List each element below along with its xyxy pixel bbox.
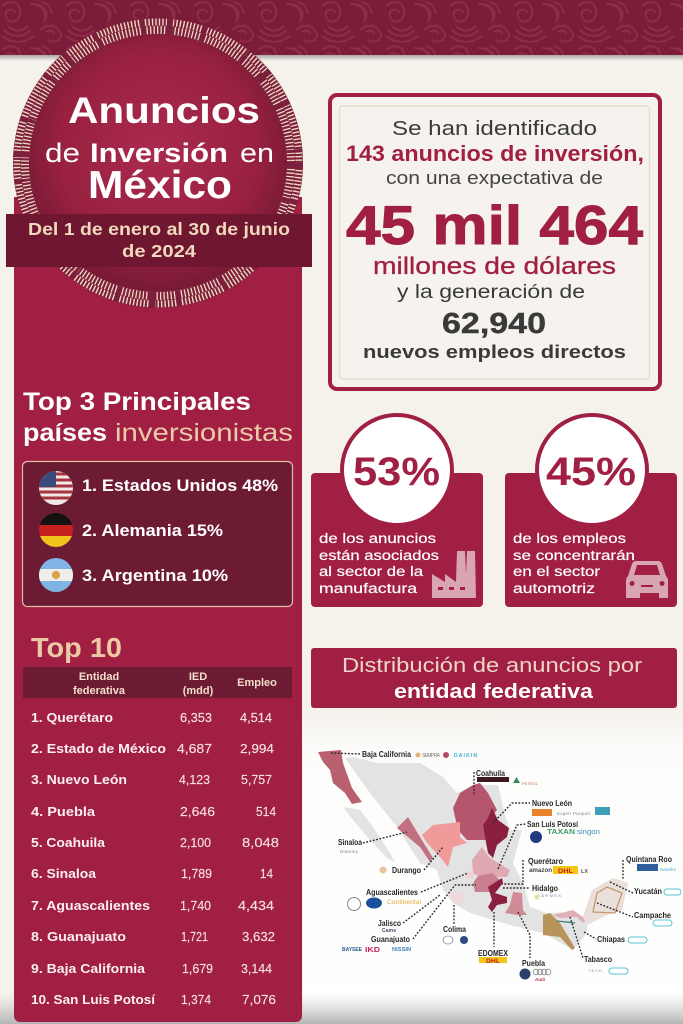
table rows: 14 (260, 866, 273, 881)
label: Querétaro: amazon (529, 867, 552, 874)
label: Quintana Roo (626, 855, 676, 872)
label: Guanajuato: BAYSEE (342, 947, 363, 953)
title text: Anuncios (68, 90, 260, 131)
table rows: 514 (256, 804, 276, 819)
table rows: 8,048 (242, 835, 279, 850)
label: Nuevo León: Expert Parquet (557, 811, 591, 816)
decorative top band (0, 0, 683, 61)
heading: top 3 countries: Top 3 Principales (23, 388, 251, 416)
icon: Argentina flag (39, 558, 73, 592)
title text: México (88, 164, 232, 207)
Nuevo León (483, 808, 509, 858)
label: Quintana Roo: Quintana Roo (626, 855, 672, 864)
heading: map title: entidad federativa (394, 681, 594, 703)
table rows: 2,100 (180, 835, 211, 850)
label: Chiapas: Chiapas (597, 935, 625, 944)
table header: Empleo (237, 677, 277, 689)
date ribbon: Del 1 de enero al 30 de junio (28, 219, 290, 239)
panel: 45% automotive card: 45% (546, 450, 636, 494)
title text (45, 90, 274, 207)
table rows: 3. Nuevo León (31, 772, 127, 787)
table rows: 4,687 (177, 741, 212, 756)
table rows: 3,632 (242, 929, 275, 944)
label: Querétaro: Querétaro (528, 857, 563, 866)
label: Aguascalientes: Continental (387, 900, 421, 906)
table rows: 4,123 (179, 772, 210, 787)
label: Yucatán: Yucatán (634, 887, 662, 896)
panel: 53% manufacturing card: manufactura (319, 581, 418, 596)
table rows: 4. Puebla (31, 804, 96, 819)
label: Campeche: Campache (634, 911, 671, 920)
table rows: 1,740 (180, 898, 211, 913)
table rows: 9. Baja California (31, 961, 146, 976)
label: Sinaloa (338, 838, 362, 854)
number: jobs: 62,940 (442, 308, 546, 340)
label: Colima (443, 925, 468, 944)
label: Baja California: SEMPRA (422, 753, 441, 759)
map area background (303, 712, 683, 1024)
date ribbon (6, 214, 312, 267)
date ribbon: de 2024 (122, 241, 196, 261)
label: Colima: Colima (443, 925, 466, 934)
table rows: 1. Querétaro (31, 710, 113, 725)
label: Baja California: DAIKIN (454, 753, 477, 759)
label: Aguascalientes: Aguascalientes (366, 888, 418, 897)
panel: headline figures: Se han identificado (392, 118, 597, 140)
label: Tabasco: Tabasco (584, 955, 612, 964)
label: Querétaro: LX (581, 869, 588, 875)
label: San Luis Potosí: TAXAN (547, 829, 575, 836)
label: Baja California (362, 750, 477, 759)
text: Argentina: 3. Argentina 10% (82, 566, 228, 585)
label: Querétaro: DHL (558, 868, 573, 875)
panel: 45% automotive card (505, 415, 677, 607)
Coahuila (453, 783, 497, 840)
table rows: 2. Estado de México (31, 741, 166, 756)
Yucatán peninsula (583, 878, 628, 925)
table rows: 8. Guanajuato (31, 929, 126, 944)
label: Nuevo León: Nuevo León (532, 799, 572, 808)
label: Jalisco: Cams (382, 928, 396, 934)
text: Alemania: 2. Alemania 15% (82, 521, 223, 540)
panel: headline figures: millones de dólares (373, 253, 616, 280)
panel: 53% manufacturing card: 53% (353, 450, 440, 494)
label: Baja California: Baja California (362, 750, 411, 759)
label: Tabasco: TECH (588, 968, 602, 973)
heading: top 3 countries (23, 388, 293, 447)
table header: federativa (73, 685, 126, 697)
label: Sinaloa: Sinaloa (338, 838, 362, 847)
label: Yucatán (634, 887, 681, 896)
label: Coahuila: Coahuila (476, 769, 505, 778)
label: Guanajuato: Guanajuato (371, 935, 410, 944)
Chiapas area (543, 913, 575, 950)
label: San Luis Potosí: San Luis Potosí (527, 820, 579, 829)
label: Nuevo León (532, 799, 610, 816)
map leader lines (331, 753, 633, 958)
label: Durango (380, 866, 421, 875)
table rows: 1,789 (181, 866, 212, 881)
table header (23, 667, 292, 698)
panel: 53% manufacturing card: están asociados (319, 548, 439, 563)
title text: en (240, 138, 274, 168)
heading: top 10: Top 10 (31, 632, 122, 663)
panel: headline figures: y la generación de (397, 282, 585, 303)
Sinaloa (397, 817, 433, 862)
panel: 53% manufacturing card: al sector de la (319, 564, 424, 579)
icon: Germany flag (39, 513, 73, 547)
title text: Inversión (90, 138, 228, 168)
label: Coahuila (476, 769, 539, 786)
map labels and logos (338, 750, 681, 982)
label: EDOMEX: EDOMEX (478, 949, 509, 958)
label: Puebla: Audi (535, 977, 545, 982)
table rows: 2,646 (180, 804, 215, 819)
panel: headline figures (330, 95, 660, 389)
Guanajuato (473, 873, 500, 892)
table rows: 1,679 (182, 961, 213, 976)
heading: map title (311, 648, 677, 708)
Puebla (505, 892, 527, 915)
label: Aguascalientes (348, 888, 421, 910)
panel: headline figures: 143 anuncios de inversión, (346, 141, 644, 166)
heading: map title: Distribución de anuncios por (342, 655, 642, 677)
icon: USA flag (39, 471, 73, 505)
label: Jalisco: Jalisco (378, 919, 401, 928)
table header: (mdd) (183, 685, 214, 697)
label: Guanajuato (342, 935, 411, 954)
label: San Luis Potosí (527, 820, 600, 843)
label: Querétaro (528, 857, 588, 875)
panel: 45% automotive card: automotriz (513, 581, 595, 596)
text: Estados Unidos: 1. Estados Unidos 48% (82, 476, 278, 495)
table rows: 4,514 (240, 710, 272, 725)
panel: 53% manufacturing card (311, 415, 483, 607)
table: top 10 states (23, 667, 292, 1007)
table rows: 10. San Luis Potosí (31, 992, 155, 1007)
label: Puebla (520, 959, 551, 982)
label: EDOMEX (478, 949, 509, 965)
table rows: 3,144 (241, 961, 272, 976)
table rows: 2,994 (240, 741, 274, 756)
label: Guanajuato: NISSIN (392, 947, 411, 953)
label: EDOMEX: DHL (486, 959, 500, 965)
table rows: 6. Sinaloa (31, 866, 97, 881)
label: Sinaloa: Diamley (340, 849, 359, 854)
table rows: 1,721 (181, 929, 208, 944)
table header: Entidad (79, 671, 119, 683)
panel: 53% manufacturing card: de los anuncios (319, 531, 436, 546)
Estado de México (488, 878, 507, 912)
label: San Luis Potosí: singon (577, 829, 600, 836)
panel: 45% automotive card: en el sector (513, 564, 601, 579)
label: Campeche (634, 911, 672, 926)
Jalisco (450, 892, 465, 905)
icon: factory (432, 551, 476, 598)
label: Hidalgo: Hidalgo (532, 884, 558, 893)
Baja California (318, 750, 362, 804)
ornamental ring (13, 18, 303, 308)
panel: headline figures: con una expectativa de (386, 168, 603, 188)
bottom fade (0, 993, 683, 1024)
label: Jalisco (378, 919, 401, 934)
number: investment amount: 45 mil 464 (346, 194, 643, 256)
San Luis Potosí (472, 847, 510, 877)
title text: de (45, 138, 80, 168)
panel: 45% automotive card: de los empleos (513, 531, 626, 546)
label: Puebla: Puebla (522, 959, 545, 968)
label: Hidalgo (532, 884, 561, 900)
inner disc (30, 35, 286, 291)
panel: top 3 countries list (22, 462, 292, 606)
map: Mexico by state (318, 750, 628, 950)
heading: top 3 countries: países (23, 419, 107, 447)
table rows: 6,353 (180, 710, 212, 725)
table rows: 5,757 (241, 772, 272, 787)
table rows: 5. Coahuila (31, 835, 106, 850)
panel: left maroon column (14, 197, 302, 1022)
route line (593, 887, 622, 913)
title medallion (13, 18, 303, 308)
label: Tabasco (584, 955, 628, 974)
Tabasco area (553, 910, 587, 923)
table rows: 7,076 (242, 992, 276, 1007)
panel: headline figures: nuevos empleos directos (363, 342, 626, 362)
Durango (422, 822, 467, 867)
heading: top 3 countries: inversionistas (115, 419, 293, 447)
table rows: 4,434 (238, 898, 274, 913)
table rows: 7. Aguascalientes (31, 898, 150, 913)
label: Quintana Roo: Netafim (660, 867, 676, 872)
Baja California Sur (343, 807, 395, 862)
table rows: 1,374 (181, 992, 211, 1007)
label: Hidalgo: CARMEX (537, 893, 561, 898)
label: Chiapas (597, 935, 647, 944)
table header: IED (189, 671, 207, 683)
Aguascalientes (465, 871, 474, 879)
label: Coahuila: PETROL (522, 781, 539, 786)
panel: 45% automotive card: se concentrarán (513, 548, 635, 563)
label: Guanajuato: IKD (365, 947, 380, 954)
table rows (31, 710, 279, 1007)
icon: car (626, 561, 668, 598)
Mexico silhouette (345, 757, 628, 950)
label: Durango: Durango (392, 866, 421, 875)
